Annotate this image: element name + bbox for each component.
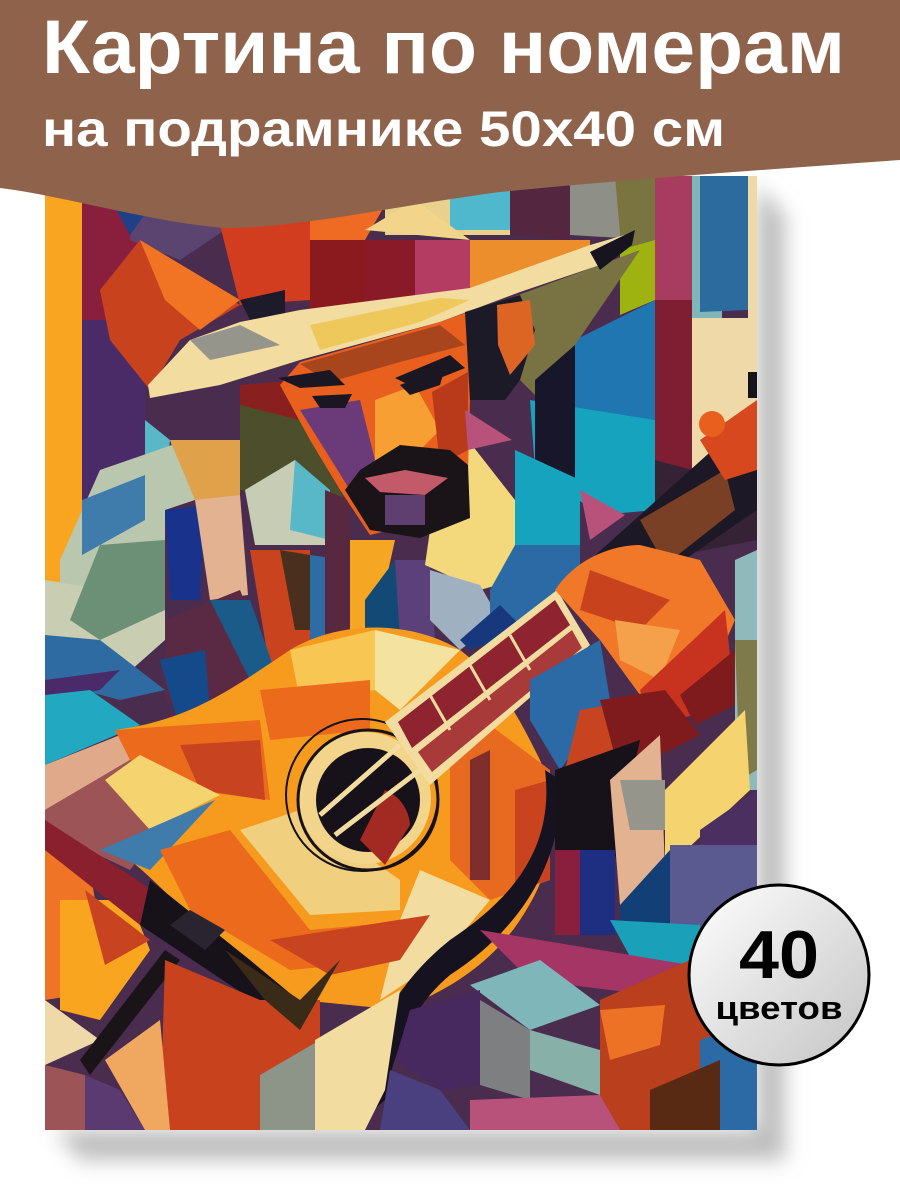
guitar neck	[385, 372, 757, 785]
badge: 40 colours: цветов	[716, 990, 842, 1026]
hat	[100, 200, 635, 398]
background blocks	[45, 176, 757, 790]
guitar body	[100, 628, 560, 1130]
lower right body	[380, 710, 757, 1130]
guitar sound hole	[286, 719, 438, 871]
title line one: Картина по номерам	[42, 5, 845, 90]
hand on the neck	[530, 545, 735, 780]
canvas shadow	[55, 185, 785, 1160]
painting	[45, 176, 757, 1130]
shirt and torso	[45, 380, 580, 870]
face	[278, 295, 535, 538]
top banner	[0, 0, 900, 228]
badge: 40 colours: 40	[739, 917, 819, 993]
badge: 40 colours	[689, 885, 869, 1065]
lower left	[45, 820, 400, 1130]
title line two: на подрамнике 50х40 см	[42, 101, 725, 157]
